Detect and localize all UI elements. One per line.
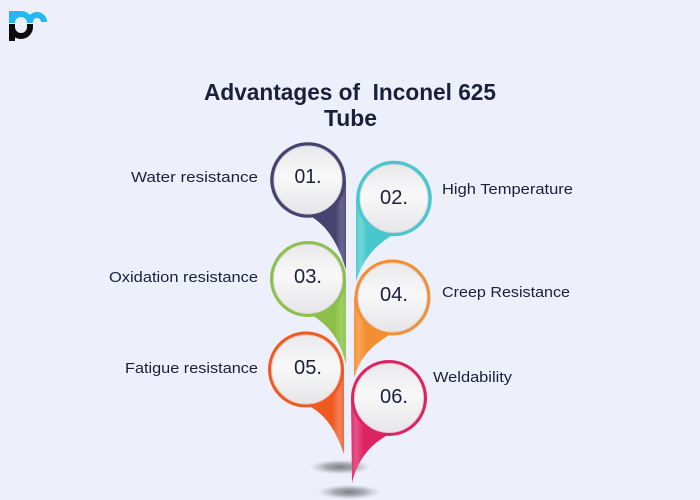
shadow: pin 06 bbox=[317, 484, 381, 500]
label: weldability: Weldability bbox=[433, 369, 513, 386]
label: high temperature: High Temperature bbox=[442, 181, 573, 198]
pin 02 bbox=[356, 161, 432, 282]
pin 05 bbox=[268, 332, 344, 454]
shadow: pin 05 bbox=[309, 460, 371, 474]
label: oxidation resistance: Oxidation resistance bbox=[109, 269, 258, 286]
pin 04: 04. bbox=[380, 284, 408, 306]
title: Advantages of Inconel 625 bbox=[204, 79, 496, 105]
label: fatigue resistance: Fatigue resistance bbox=[125, 360, 258, 377]
pin 03: 03. bbox=[294, 266, 322, 288]
pin 01 bbox=[270, 142, 346, 270]
pin 02: 02. bbox=[380, 187, 408, 209]
pin 05: 05. bbox=[294, 357, 322, 379]
logo bbox=[12, 14, 44, 41]
pin 01: 01. bbox=[294, 166, 322, 188]
title bbox=[204, 79, 496, 131]
title: Tube bbox=[324, 105, 377, 131]
pin 03 bbox=[270, 241, 346, 364]
label: water resistance: Water resistance bbox=[131, 169, 258, 186]
pin 06: 06. bbox=[380, 386, 408, 408]
label: creep resistance: Creep Resistance bbox=[442, 284, 570, 301]
pin 06 bbox=[351, 360, 427, 483]
pin 04 bbox=[354, 260, 430, 378]
